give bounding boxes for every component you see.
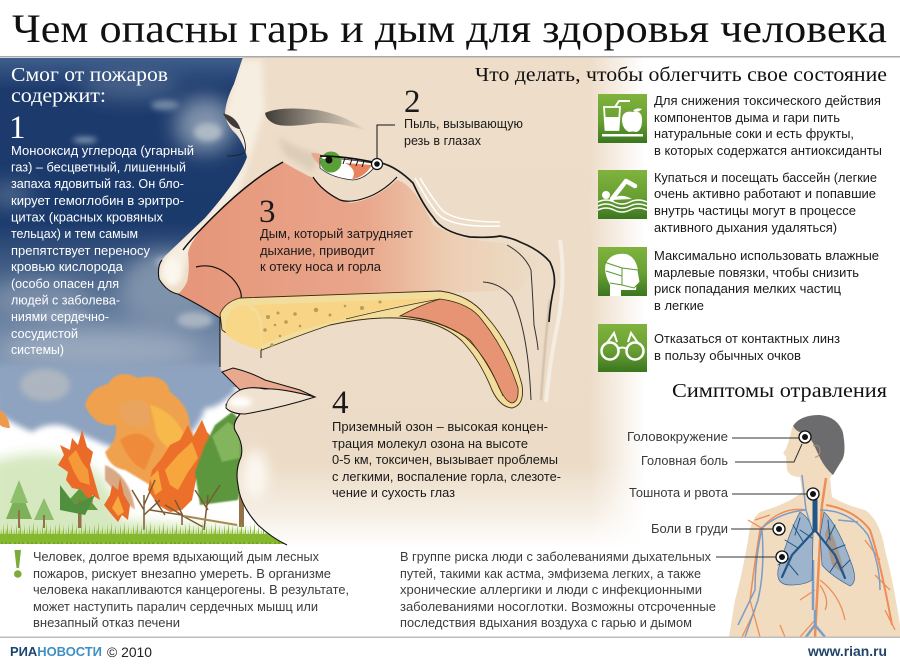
- eyebrow: [265, 109, 367, 131]
- risk group text: хронические аллергики и люди с инфекционными: [400, 583, 702, 597]
- callout 4: ozone: [332, 385, 561, 500]
- eyeball: [320, 158, 377, 180]
- advice 2 text: очень активно работают и попавшие: [654, 187, 876, 201]
- advice 1 text: [654, 94, 882, 158]
- throat contours: [377, 162, 563, 402]
- marker lines and dots: [716, 438, 808, 557]
- warning text: человека накапливаются канцерогены. В результате,: [33, 583, 349, 597]
- arteries: [742, 478, 895, 637]
- carbon monoxide text: тельцах) и тем самым: [11, 227, 138, 241]
- risk group text: путей, такими как астма, эмфизема легких, а также: [400, 567, 701, 581]
- callout 4: ozone: трация молекул озона на высоте: [332, 437, 528, 451]
- advice 3 text: Максимально использовать влажные: [654, 249, 879, 263]
- warning text: пожаров, рискует внезапно умереть. В организме: [33, 567, 331, 581]
- ear: [813, 445, 820, 457]
- panel: advice list: [598, 94, 882, 372]
- title: Чем опасны гарь и дым для здоровья человека: [12, 6, 887, 51]
- callout 4: ozone: Приземный озон – высокая концен-: [332, 420, 548, 434]
- heading smog: [11, 64, 168, 107]
- callout 4: ozone: чение и сухость глаз: [332, 486, 455, 500]
- header rule: [0, 56, 900, 58]
- footer logo: РИАНОВОСТИ: [10, 644, 102, 659]
- callout 4: ozone: с легкими, воспаление горла, слезоте-: [332, 470, 561, 484]
- icon: juice and apple: [598, 94, 647, 143]
- footer rule: [0, 636, 900, 638]
- advice 3 text: марлевые повязки, чтобы снизить: [654, 266, 859, 280]
- carbon monoxide text: ниями сердечно-: [11, 310, 109, 324]
- forest fire scene: [0, 365, 286, 545]
- warning text: [33, 550, 349, 630]
- advice 2 text: внутрь частицы могут в процессе: [654, 204, 856, 218]
- smoky sky background: [0, 58, 247, 387]
- warning text: внезапный отказ печени: [33, 616, 180, 630]
- callout 3: smoke: [259, 194, 413, 274]
- pale forest background: [0, 454, 250, 545]
- heading: symptoms: Симптомы отравления: [672, 380, 887, 402]
- callout 2: dust: резь в глазах: [404, 134, 482, 148]
- callout 2: dust: 2: [404, 84, 420, 120]
- small pine trees: [6, 480, 98, 528]
- callout 3: smoke: 3: [259, 194, 276, 230]
- callout 3: smoke: дыхание, приводит: [260, 244, 375, 258]
- icon: glasses: [598, 324, 647, 372]
- palate: [220, 291, 523, 408]
- lips: [222, 368, 315, 414]
- risk group text: [400, 550, 716, 630]
- veins: [738, 475, 880, 637]
- advice 1 text: в которых содержатся антиоксиданты: [654, 144, 882, 158]
- burning trees flames: [58, 420, 218, 522]
- footer copyright: © 2010: [107, 644, 152, 660]
- brow ridge shadow: [225, 115, 245, 156]
- callout 3: smoke: Дым, который затрудняет: [260, 227, 413, 241]
- carbon monoxide text: препятствует переносу: [11, 244, 151, 258]
- callout 3: smoke: к отеку носа и горла: [260, 260, 381, 274]
- icon: swimmer: [598, 170, 647, 219]
- risk group text: заболеваниями носоглотки. Возможны отсроченные: [400, 600, 716, 614]
- advice 1 text: Для снижения токсического действия: [654, 94, 881, 108]
- advice 1 text: натуральные соки и есть фрукты,: [654, 127, 854, 141]
- carbon monoxide text: цитах (красных кровяных: [11, 211, 164, 225]
- carbon monoxide text: сосудистой: [11, 327, 78, 341]
- advice 4 text: Отказаться от контактных линз: [654, 332, 840, 346]
- advice 4 text: в пользу обычных очков: [654, 349, 801, 363]
- lungs: [778, 512, 813, 585]
- carbon monoxide text: кровью кислорода: [11, 260, 123, 274]
- left block: smog text: [9, 64, 194, 357]
- face highlights: [160, 60, 268, 500]
- human body anatomy figure: [716, 415, 900, 637]
- callout 4: ozone: 0-5 км, токсичен, вызывает проблемы: [332, 453, 558, 467]
- callout 2: dust: Пыль, вызывающую: [404, 117, 523, 131]
- hair: [793, 415, 844, 475]
- carbon monoxide text: системы): [11, 343, 64, 357]
- icon: gauze mask: [598, 247, 647, 296]
- under eye line: [313, 177, 397, 201]
- heading smog: Смог от пожаров: [11, 64, 168, 86]
- warning text: Человек, долгое время вдыхающий дым лесных: [33, 550, 320, 564]
- eye and brow: [265, 109, 397, 201]
- footer site url: www.rian.ru: [807, 644, 887, 659]
- carbon monoxide text: кирует гемоглобин в эритро-: [11, 194, 184, 208]
- carbon monoxide text: [11, 144, 194, 357]
- advice 2 text: [654, 171, 877, 235]
- nasal cavity: [178, 162, 540, 318]
- risk group text: В группе риска люди с заболеваниями дыхательных: [400, 550, 712, 564]
- carbon monoxide text: Монооксид углерода (угарный: [11, 144, 194, 158]
- risk group text: последствия вдыхания воздуха с гарью и дымом: [400, 616, 692, 630]
- grass: [0, 522, 286, 544]
- eye socket shade: [278, 137, 320, 172]
- advice 2 text: Купаться и посещать бассейн (легкие: [654, 171, 877, 185]
- carbon monoxide text: людей с заболева-: [11, 294, 120, 308]
- bronchi: [778, 500, 850, 578]
- symptom labels: Головокружение: [627, 430, 728, 444]
- carbon monoxide text: газ) – бесцветный, лишенный: [11, 161, 186, 175]
- heading smog: содержит:: [11, 85, 106, 107]
- head profile and beige background: [159, 57, 900, 548]
- advice 3 text: риск попадания мелких частиц: [654, 282, 841, 296]
- advice 2 text: активного дыхания удаляться): [654, 221, 837, 235]
- face outline: [158, 260, 287, 545]
- advice 1 text: компонентов дыма и гари пить: [654, 111, 840, 125]
- symptom labels: Головная боль: [641, 454, 728, 468]
- number 1: 1: [9, 110, 26, 146]
- advice 3 text: в легкие: [654, 299, 704, 313]
- carbon monoxide text: (особо опасен для: [11, 277, 119, 291]
- symptom labels: [627, 430, 728, 536]
- warning text: может наступить паралич сердечных мышц или: [33, 600, 318, 614]
- smoke cloud: [0, 365, 235, 459]
- right fade to white: [590, 57, 900, 548]
- green trees: [60, 412, 244, 530]
- callout 2: dust: [372, 84, 523, 170]
- advice 3 text: [654, 249, 879, 313]
- symptom labels: Боли в груди: [651, 522, 728, 536]
- icon: exclamation mark: [14, 550, 22, 578]
- symptom labels: Тошнота и рвота: [629, 486, 728, 500]
- advice 4 text: [654, 332, 840, 363]
- heading: what to do: Что делать, чтобы облегчить свое состояние: [475, 64, 887, 86]
- callout 4: ozone: 4: [332, 385, 348, 421]
- body silhouette: [729, 415, 900, 637]
- orange smoke billows: [85, 374, 198, 510]
- carbon monoxide text: запаха ядовитый газ. Он бло-: [11, 177, 184, 191]
